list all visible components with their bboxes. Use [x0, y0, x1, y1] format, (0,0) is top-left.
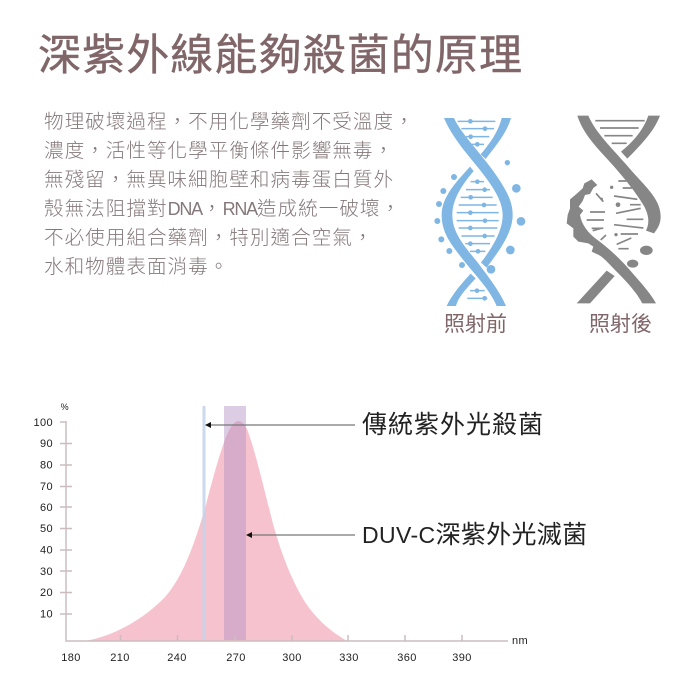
label: DUV-C sterilization: DUV-C深紫外光滅菌	[362, 521, 587, 549]
x axis labels: 300	[282, 652, 302, 664]
x axis labels: 390	[452, 652, 472, 664]
y axis labels: %	[61, 402, 69, 412]
y axis labels: 20	[40, 587, 53, 599]
x axis labels: nm	[512, 635, 528, 647]
title: 深紫外線能夠殺菌的原理	[38, 32, 523, 80]
x axis labels: 270	[226, 652, 246, 664]
y axis labels	[33, 402, 69, 620]
y axis labels: 60	[40, 502, 53, 514]
x axis labels: 330	[339, 652, 359, 664]
y axis labels: 40	[40, 544, 53, 556]
label: after irradiation: 照射後	[589, 313, 652, 336]
y axis labels: 80	[40, 460, 53, 472]
icon: damaged DNA after irradiation	[567, 116, 661, 303]
y axis labels: 10	[40, 608, 53, 620]
x axis labels: 240	[167, 652, 187, 664]
text block: explanation: 物理破壞過程，不用化學藥劑不受溫度，	[44, 111, 415, 133]
band: DUV-C	[224, 406, 246, 640]
text block: explanation	[44, 111, 415, 278]
arrow: traditional UV	[205, 422, 355, 428]
text block: explanation: 濃度，活性等化學平衡條件影響無毒，	[44, 140, 394, 162]
text block: explanation: 不必使用組合藥劑，特別適合空氣，	[44, 227, 374, 249]
x axis labels: 360	[397, 652, 417, 664]
curve: absorption	[85, 421, 347, 641]
icon: intact DNA before irradiation	[434, 118, 525, 306]
arrow: DUV-C	[246, 532, 355, 538]
y axis labels: 100	[33, 417, 53, 429]
x axis labels	[61, 635, 528, 664]
y axis labels: 50	[40, 523, 53, 535]
band: traditional UV 254nm	[202, 406, 206, 640]
label: traditional UV sterilization: 傳統紫外光殺菌	[362, 411, 544, 439]
label: before irradiation: 照射前	[444, 313, 507, 336]
y axis labels: 30	[40, 566, 53, 578]
axes and ticks	[60, 421, 508, 641]
y axis labels: 70	[40, 481, 53, 493]
text block: explanation: 無殘留，無異味細胞壁和病毒蛋白質外	[44, 169, 394, 191]
text block: explanation: 水和物體表面消毒。	[44, 256, 229, 278]
text block: explanation: 殼無法阻擋對DNA，RNA造成統一破壞，	[44, 198, 401, 220]
x axis labels: 180	[61, 652, 81, 664]
y axis labels: 90	[40, 438, 53, 450]
chart: DUV absorption spectrum	[33, 402, 528, 664]
x axis labels: 210	[110, 652, 130, 664]
